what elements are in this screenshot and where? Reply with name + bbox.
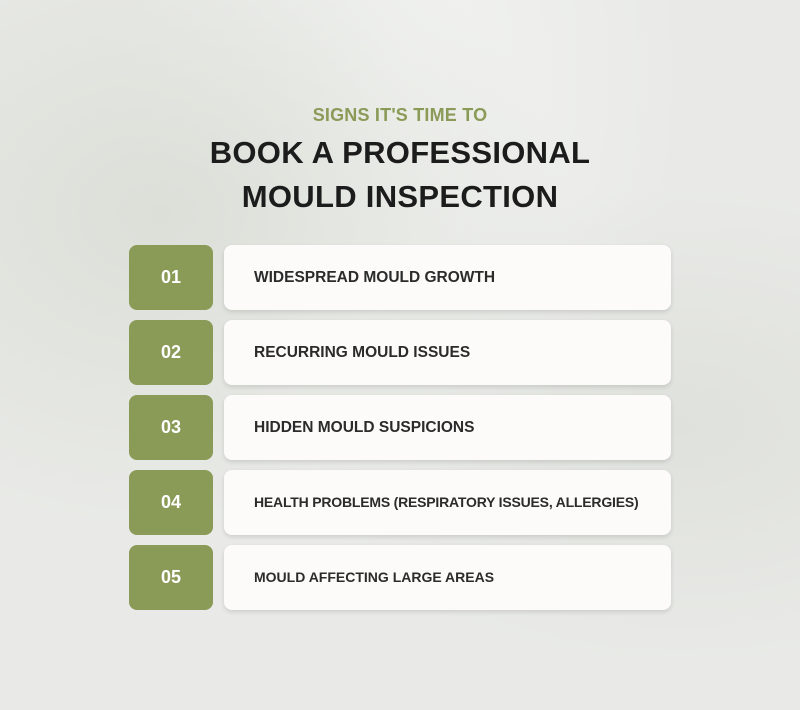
row 03: 03 xyxy=(161,417,181,437)
title: BOOK A PROFESSIONAL xyxy=(210,135,590,170)
row 03: HIDDEN MOULD SUSPICIONS xyxy=(254,419,474,436)
title xyxy=(210,135,590,214)
row 03 xyxy=(129,395,672,464)
row 04: HEALTH PROBLEMS (RESPIRATORY ISSUES, ALLERGIES) xyxy=(254,494,638,510)
row 04 xyxy=(129,470,672,538)
row 04: 04 xyxy=(161,492,181,512)
row 01: 01 xyxy=(161,267,181,287)
row 05: 05 xyxy=(161,567,181,587)
subtitle: SIGNS IT'S TIME TO xyxy=(313,105,487,125)
row 01 xyxy=(129,245,672,314)
row 01: WIDESPREAD MOULD GROWTH xyxy=(254,269,495,286)
row 05: MOULD AFFECTING LARGE AREAS xyxy=(254,569,494,585)
row 05 xyxy=(129,545,672,614)
row 02: RECURRING MOULD ISSUES xyxy=(254,344,470,361)
title: MOULD INSPECTION xyxy=(242,179,558,214)
row 02: 02 xyxy=(161,342,181,362)
row 02 xyxy=(129,320,672,388)
